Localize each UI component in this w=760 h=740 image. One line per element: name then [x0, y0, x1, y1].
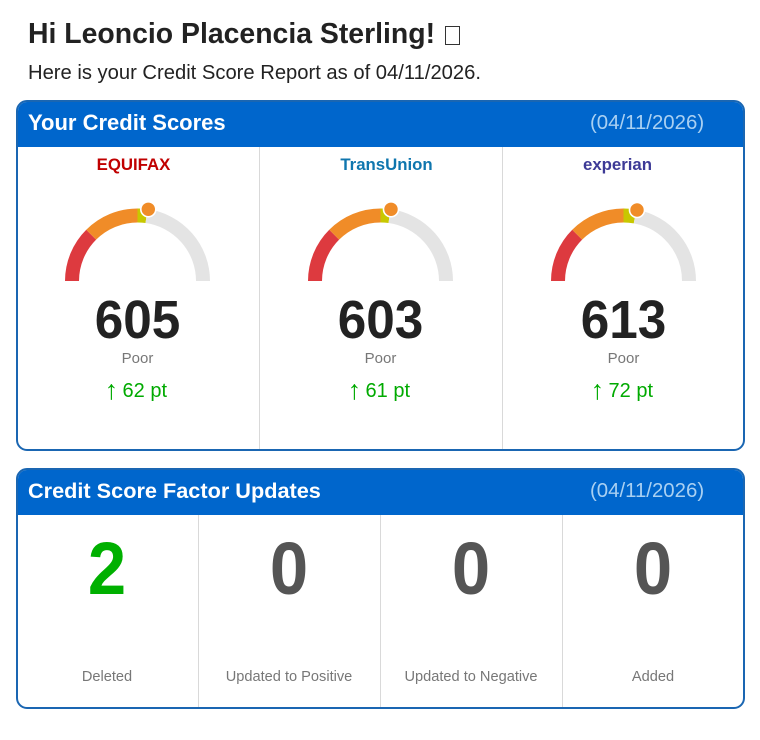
change: Experian: ↑	[591, 375, 604, 405]
stat label: updated to negative: Updated to Negative	[404, 669, 538, 685]
change: Experian	[591, 375, 653, 405]
stat number: updated to negative: 0	[452, 527, 490, 610]
rating: Experian: Poor	[608, 350, 639, 367]
score: Equifax: 605	[95, 290, 180, 350]
score: Experian: 613	[581, 290, 666, 350]
panel: your credit scores	[16, 100, 745, 451]
panel header: factor updates	[16, 468, 745, 515]
change: TransUnion: 61 pt	[366, 380, 410, 402]
change: Experian: 72 pt	[609, 380, 653, 402]
panel header: credit scores: Your Credit Scores	[28, 110, 226, 135]
change: Equifax: ↑	[105, 375, 118, 405]
change: Equifax: 62 pt	[123, 380, 167, 402]
gauge: TransUnion	[308, 202, 453, 281]
stat number: deleted: 2	[88, 527, 126, 610]
title: Hi Leoncio Placencia Sterling!	[28, 18, 435, 50]
panel header: factor updates: (04/11/2026)	[590, 480, 704, 502]
change: Equifax	[105, 375, 167, 405]
stat label: added: Added	[632, 669, 674, 685]
subtitle: Here is your Credit Score Report as of 04/11/2026.	[28, 62, 481, 84]
panel: credit score factor updates	[16, 468, 745, 709]
stat label: deleted: Deleted	[82, 669, 132, 685]
change: TransUnion: ↑	[348, 375, 361, 405]
change: TransUnion	[348, 375, 410, 405]
panel header: credit scores: (04/11/2026)	[590, 112, 704, 134]
gauge: Equifax	[65, 202, 210, 281]
rating: TransUnion: Poor	[365, 350, 396, 367]
icon: missing-glyph box	[445, 26, 460, 45]
rating: Equifax: Poor	[122, 350, 153, 367]
gauge: Experian	[551, 203, 696, 281]
panel header: credit scores	[16, 100, 745, 147]
stat number: updated to positive: 0	[270, 527, 308, 610]
brand: Experian: experian	[583, 155, 652, 174]
stat label: updated to positive: Updated to Positive	[226, 669, 352, 685]
stat number: added: 0	[634, 527, 672, 610]
score: TransUnion: 603	[338, 290, 423, 350]
brand: TransUnion: TransUnion	[340, 155, 433, 174]
brand: Equifax: EQUIFAX	[97, 155, 170, 174]
panel header: factor updates: Credit Score Factor Updates	[28, 478, 321, 503]
